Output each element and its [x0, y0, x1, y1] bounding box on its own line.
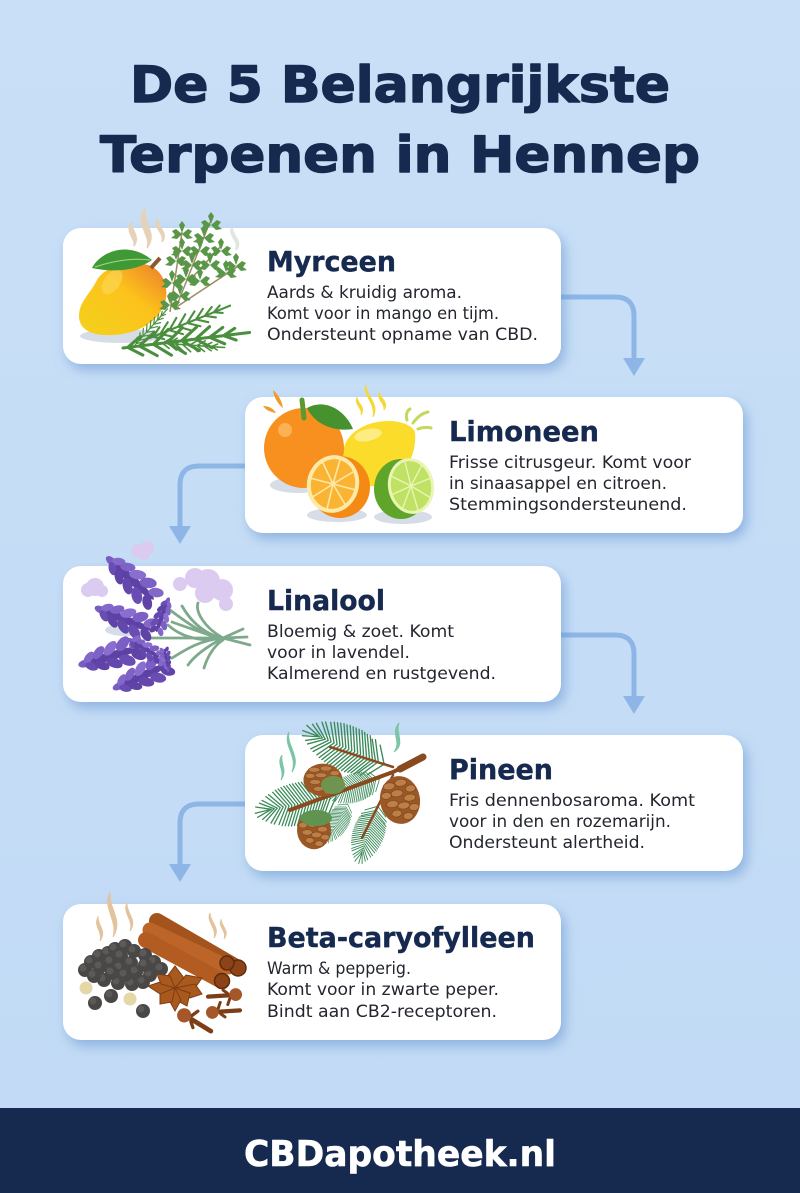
text block: Myrceen description: Ondersteunt opname van CBD.: [267, 325, 538, 344]
title: Terpenen in Hennep: [100, 126, 700, 184]
text block: Beta-caryofylleen description: [267, 959, 499, 1021]
panel: Limoneen: [245, 385, 743, 533]
arrow: Pineen to Beta-caryofylleen: [169, 804, 245, 882]
icon: citrus fruits: [263, 385, 439, 524]
heading: Beta-caryofylleen: Beta-caryofylleen: [267, 921, 535, 954]
icon: lavender: [74, 541, 250, 704]
heading: Linalool: Linalool: [267, 584, 385, 617]
text block: Myrceen description: [267, 283, 538, 344]
text block: Pineen description: [449, 791, 696, 852]
card background: [245, 397, 743, 533]
text block: Myrceen description: Aards & kruidig aroma.: [267, 283, 462, 302]
text block: Limoneen description: in sinaasappel en citroen.: [449, 474, 667, 493]
text block: Linalool description: [267, 622, 496, 683]
text block: Pineen description: voor in den en rozemarijn.: [449, 812, 671, 831]
arrow: Limoneen to Linalool: [169, 466, 245, 544]
panel: Beta-caryofylleen: [63, 892, 561, 1040]
card background: [63, 566, 561, 702]
text block: Pineen description: Fris dennenbosaroma. Komt: [449, 791, 696, 810]
heading: Limoneen: Limoneen: [449, 415, 599, 448]
icon: pepper, cinnamon and cloves: [78, 892, 246, 1034]
card background: [63, 904, 561, 1040]
panel: Pineen: [245, 709, 743, 871]
arrow: Linalool to Pineen: [561, 635, 645, 714]
text block: Beta-caryofylleen description: Bindt aan CB2-receptoren.: [267, 1002, 497, 1021]
footer brand: CBDapotheek.nl: [244, 1134, 556, 1175]
text block: Linalool description: voor in lavendel.: [267, 643, 410, 662]
heading: Myrceen: Myrceen: [267, 245, 396, 278]
panel: Linalool: [63, 541, 561, 704]
text block: Limoneen description: Frisse citrusgeur. Komt voor: [449, 453, 691, 472]
arrow: Myrceen to Limoneen: [561, 297, 645, 376]
text block: Linalool description: Kalmerend en rustgevend.: [267, 664, 496, 683]
title: [100, 56, 700, 184]
card background: [245, 735, 743, 871]
footer: [0, 1108, 800, 1193]
heading: Pineen: Pineen: [449, 753, 553, 786]
text block: Linalool description: Bloemig & zoet. Komt: [267, 622, 455, 641]
text block: Limoneen description: [449, 453, 691, 514]
card background: [63, 228, 561, 364]
text block: Pineen description: Ondersteunt alertheid.: [449, 833, 645, 852]
text block: Beta-caryofylleen description: Komt voor in zwarte peper.: [267, 980, 499, 999]
icon: pine branch: [251, 709, 423, 868]
text block: Beta-caryofylleen description: Warm & pepperig.: [267, 959, 411, 978]
title: De 5 Belangrijkste: [130, 56, 670, 114]
icon: mango and herbs: [79, 208, 251, 361]
text block: Limoneen description: Stemmingsondersteunend.: [449, 495, 687, 514]
panel: Myrceen: [63, 208, 561, 364]
text block: Myrceen description: Komt voor in mango en tijm.: [267, 304, 499, 323]
